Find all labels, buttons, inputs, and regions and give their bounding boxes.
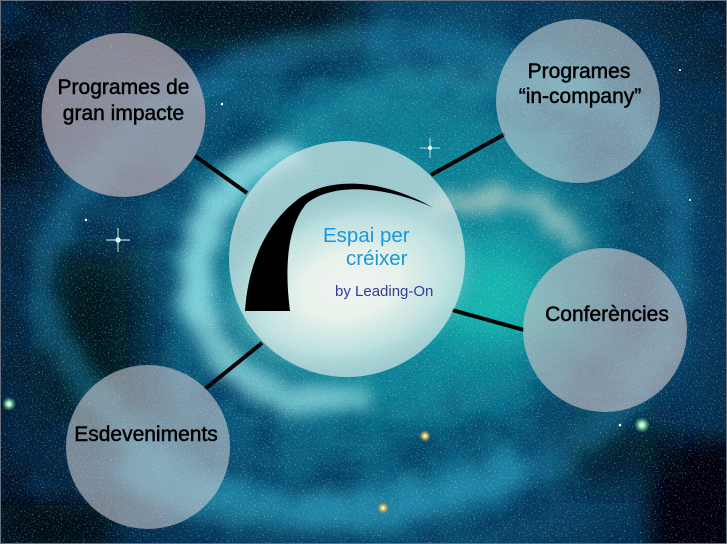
- panel: programes in-company: [496, 19, 660, 183]
- connector: conferències to centre: [452, 310, 524, 330]
- logo text: Espai per créixer: créixer: [346, 247, 408, 270]
- icon: black swoosh arc: [245, 184, 434, 311]
- connector: gran impacte to centre: [195, 156, 247, 193]
- heading: programes de gran impacte: Programes de: [58, 76, 189, 99]
- heading: esdeveniments: Esdeveniments: [74, 423, 218, 446]
- panel: central logo circle: [229, 141, 465, 377]
- logo text: Espai per créixer: Espai per: [323, 224, 410, 247]
- connector: esdeveniments to centre: [205, 343, 262, 389]
- connector: in-company to centre: [431, 134, 505, 175]
- logo text: by Leading-On: by Leading-On: [335, 283, 433, 300]
- heading: programes in-company: “in-company”: [519, 85, 641, 108]
- heading: programes de gran impacte: gran impacte: [63, 102, 184, 125]
- panel: conferències: [523, 248, 687, 412]
- panel: programes de gran impacte: [42, 33, 206, 197]
- heading: conferències: Conferències: [545, 303, 669, 326]
- logo text: Espai per créixer: [323, 224, 410, 270]
- panel: esdeveniments: [66, 365, 230, 529]
- heading: programes in-company: Programes: [528, 60, 630, 83]
